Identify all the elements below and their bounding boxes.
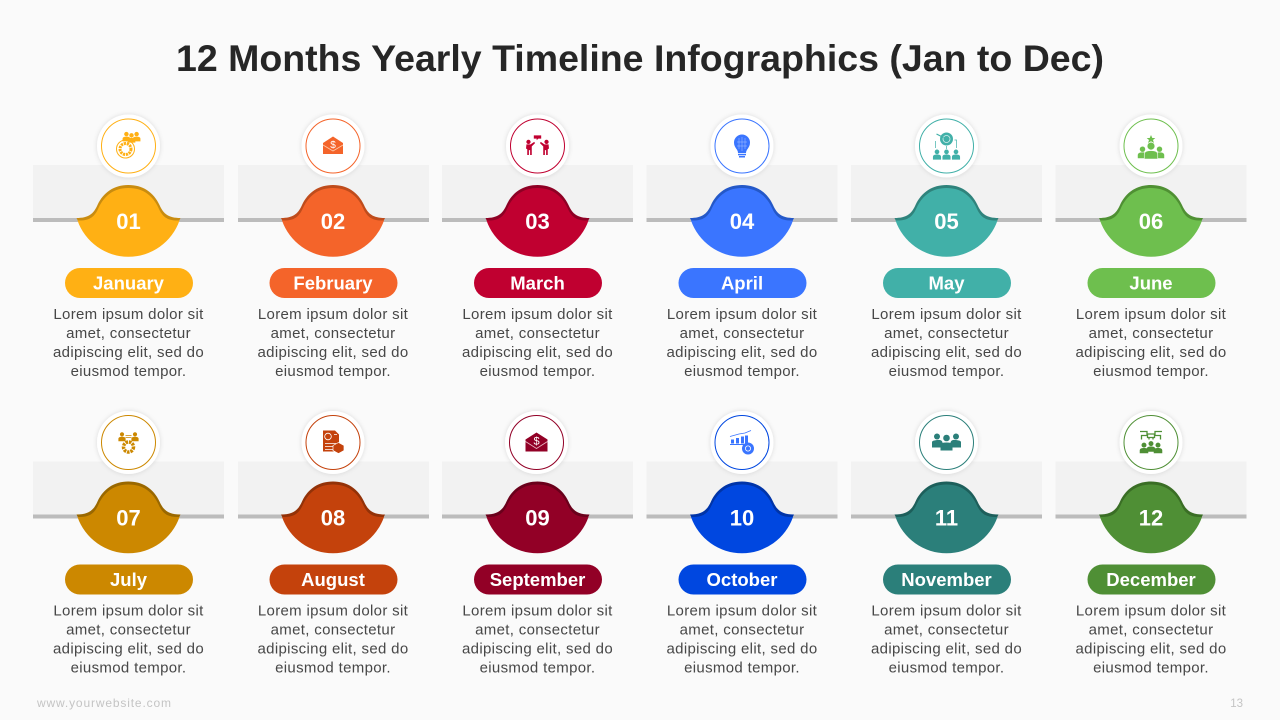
month pill	[270, 564, 398, 594]
number badge 06: 06	[1139, 209, 1163, 234]
icon: boards and team	[1120, 411, 1182, 474]
month pill	[270, 268, 398, 298]
number badge 09: 09	[525, 506, 550, 530]
number badge 09	[486, 482, 590, 553]
icon: money envelope	[505, 411, 568, 474]
icon: money envelope: $	[330, 140, 336, 151]
header band	[851, 462, 1042, 518]
number badge 07: 07	[116, 506, 141, 530]
month pill: August	[301, 569, 365, 590]
header band	[851, 165, 1042, 222]
description	[666, 602, 818, 676]
icon: invoice and box	[302, 411, 364, 474]
description	[53, 602, 204, 676]
number badge 12	[1099, 482, 1203, 553]
number badge 11	[894, 482, 998, 553]
number badge 11: 11	[935, 506, 958, 530]
number badge 08: 08	[321, 506, 345, 530]
description	[1075, 602, 1227, 676]
month pill	[883, 268, 1011, 298]
month pill	[474, 268, 602, 298]
month pill: July	[110, 569, 148, 590]
number badge 07	[76, 482, 180, 553]
header band	[442, 462, 633, 518]
month pill	[1088, 564, 1216, 594]
header band	[1056, 165, 1246, 222]
month pill: October	[707, 569, 777, 590]
panel: May	[851, 114, 1042, 380]
month pill: December	[1106, 569, 1196, 590]
number badge 05: 05	[934, 209, 959, 234]
month pill	[678, 268, 806, 298]
number badge 01: 01	[116, 209, 141, 234]
month pill: January	[93, 272, 165, 294]
number badge 05	[894, 185, 998, 257]
number badge 03: 03	[525, 209, 550, 234]
panel: October	[646, 411, 838, 676]
icon: money envelope	[302, 114, 364, 178]
month pill	[65, 268, 193, 298]
title: 12 Months Yearly Timeline Infographics (Jan to Dec)	[176, 37, 1104, 79]
panel: January	[33, 114, 224, 380]
number badge 04	[690, 185, 794, 257]
header band	[646, 165, 838, 222]
description	[1075, 306, 1227, 380]
panel: February	[238, 114, 429, 380]
month pill: February	[293, 272, 373, 294]
panel: August	[238, 411, 429, 676]
description	[257, 602, 409, 676]
month pill	[65, 564, 193, 594]
description	[871, 602, 1022, 676]
panel: June	[1056, 114, 1246, 380]
header band	[238, 165, 429, 222]
description	[53, 306, 204, 380]
month pill: March	[510, 272, 565, 294]
month pill	[474, 564, 602, 594]
icon: team with star	[1120, 114, 1182, 178]
panel: April	[646, 114, 838, 380]
month pill: May	[928, 272, 965, 294]
number badge 01	[76, 185, 180, 257]
icon: people exchange and gear	[97, 411, 160, 474]
number badge 04: 04	[730, 209, 755, 234]
icon: business team	[915, 411, 978, 474]
header band	[1056, 462, 1246, 518]
footer website: www.yourwebsite.com	[36, 696, 172, 710]
icon: money envelope: $	[533, 436, 540, 448]
month pill: April	[721, 272, 763, 294]
description	[666, 306, 818, 380]
description	[462, 306, 613, 380]
panel: July	[33, 411, 224, 676]
number badge 12: 12	[1139, 506, 1163, 530]
month pill	[1088, 268, 1216, 298]
number badge 02	[281, 185, 385, 257]
number badge 03	[486, 185, 590, 257]
page number: 13	[1230, 698, 1243, 710]
icon: two people talking	[506, 114, 569, 178]
icon: light bulb	[710, 114, 774, 178]
description	[462, 602, 613, 676]
number badge 08	[281, 482, 385, 553]
panel: September	[442, 411, 633, 676]
month pill	[883, 564, 1011, 594]
header band	[238, 462, 429, 518]
number badge 06	[1099, 185, 1203, 257]
icon: team and gear	[97, 114, 160, 178]
month pill: June	[1129, 272, 1173, 294]
panel: December	[1056, 411, 1246, 676]
month pill: September	[490, 569, 585, 590]
month pill	[678, 564, 806, 594]
icon: growth chart	[710, 411, 774, 474]
panel: November	[851, 411, 1042, 676]
number badge 10	[690, 482, 794, 553]
header band	[33, 462, 224, 518]
header band	[442, 165, 633, 222]
header band	[33, 165, 224, 222]
panel: March	[442, 114, 633, 380]
description	[871, 306, 1022, 380]
description	[257, 306, 409, 380]
number badge 10: 10	[730, 506, 754, 530]
icon: target and team	[915, 114, 978, 178]
header band	[646, 462, 838, 518]
number badge 02: 02	[321, 209, 345, 234]
month pill: November	[901, 569, 992, 590]
